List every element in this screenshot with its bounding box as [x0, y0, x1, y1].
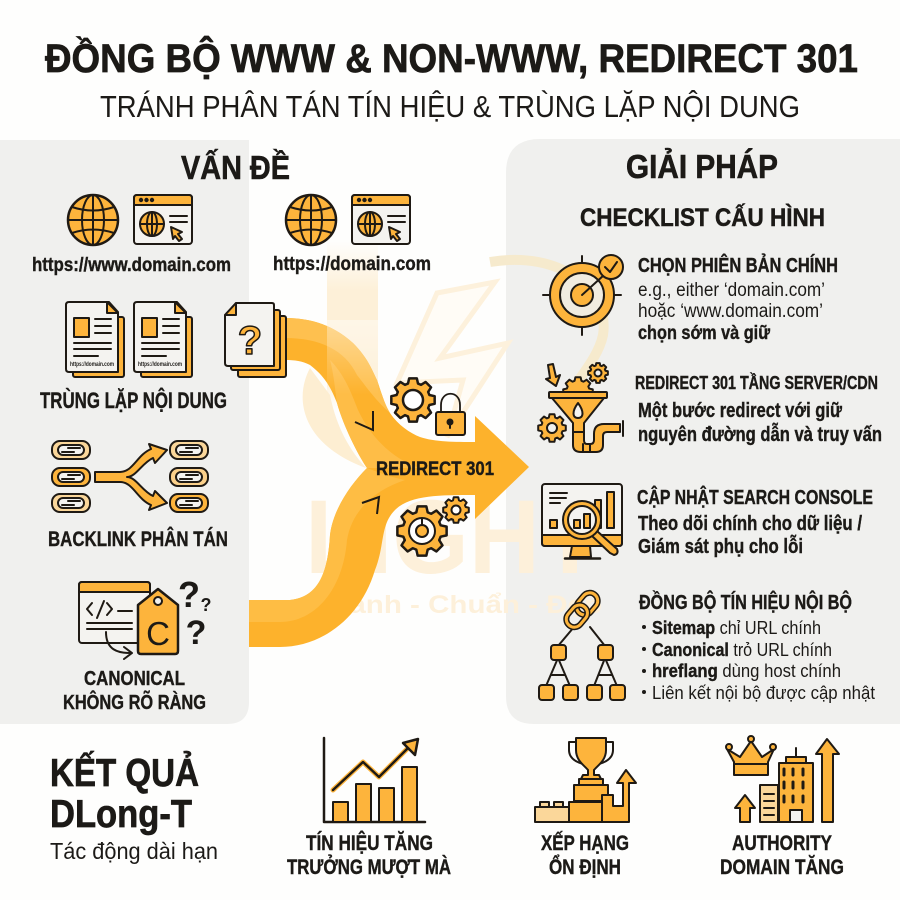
icon: duplicate document 2 [134, 302, 192, 377]
text: choose primary version: e.g., either ‘domain.com’ [638, 280, 825, 301]
text: sync internal signals: Canonical trỏ URL chính [652, 639, 832, 660]
icon: link tree [539, 590, 625, 700]
label: smooth signal growth: TÍN HIỆU TĂNG [306, 831, 433, 855]
icon: monitor analytics [542, 484, 622, 558]
icon: scattered backlinks [52, 441, 208, 512]
icon: duplicate document 1 [66, 302, 124, 377]
label: smooth signal growth [287, 831, 451, 879]
text: server-level redirect [635, 372, 882, 446]
icon: trophy on steps [535, 738, 636, 822]
subheading: checklist: CHECKLIST CẤU HÌNH [580, 203, 825, 232]
label: duplicate content: TRÙNG LẶP NỘI DUNG [40, 388, 227, 413]
panel: problem background [0, 140, 249, 724]
watermark logo [303, 240, 604, 619]
icon: gear and lock [391, 378, 465, 435]
icon: unclear canonical [79, 574, 212, 659]
text: server-level redirect: Một bước redirect với giữ [638, 400, 842, 422]
text: sync internal signals: Liên kết nội bộ được cập nhật [652, 682, 875, 703]
text: update search console: Theo dõi chính cho dữ liệu / [638, 513, 862, 535]
icon: upper chevron [355, 411, 373, 430]
label: stable ranking: ỔN ĐỊNH [549, 855, 621, 879]
icon: funnel and pipe [538, 363, 623, 452]
icon: browser non-www [352, 195, 410, 244]
icon: settings gears [397, 497, 469, 556]
text: choose primary version: chọn sớm và giữ [638, 323, 770, 344]
icon: globe non-www [286, 195, 336, 245]
icon: unclear canonical: C [146, 615, 170, 652]
icon: globe www [68, 195, 118, 245]
arrow: merging redirect flow [249, 318, 529, 647]
label: smooth signal growth: TRƯỞNG MƯỢT MÀ [287, 855, 451, 879]
text: update search console [637, 485, 873, 558]
text: choose primary version [638, 253, 838, 344]
label: domain authority up [720, 832, 844, 879]
label: unclear canonical [63, 667, 206, 714]
watermark logo: LIGHT [305, 479, 600, 596]
label: domain authority up: AUTHORITY [732, 832, 832, 855]
text: sync internal signals [639, 590, 875, 703]
results heading: DLong-T [50, 793, 192, 836]
label: domain authority up: DOMAIN TĂNG [720, 856, 844, 879]
label: unclear canonical: CANONICAL [84, 667, 185, 690]
heading: solution: GIẢI PHÁP [626, 148, 778, 185]
heading: problem: VẤN ĐỀ [181, 149, 290, 186]
watermark logo: Nhanh - Chuẩn - Đẹp [310, 591, 602, 619]
icon: lower chevron [362, 497, 379, 514]
icon: browser www [134, 195, 192, 244]
icon: unclear canonical: ? [200, 595, 212, 615]
text: sync internal signals: Sitemap chỉ URL chính [652, 617, 821, 638]
results heading [50, 751, 218, 864]
text: choose primary version: hoặc ‘www.domain.com’ [638, 301, 823, 322]
results heading: KẾT QUẢ [50, 751, 199, 795]
icon: question document stack [225, 303, 286, 377]
results heading: Tác động dài hạn [50, 838, 218, 864]
icon: growth chart [324, 738, 425, 822]
icon: unclear canonical: ? [178, 574, 200, 615]
label: stable ranking: XẾP HẠNG [541, 832, 629, 855]
text: update search console: Giám sát phụ cho lỗi [638, 534, 803, 558]
icon: question document stack: ? [238, 319, 262, 363]
label: unclear canonical: KHÔNG RÕ RÀNG [63, 690, 206, 714]
arrow label: redirect 301: REDIRECT 301 [376, 459, 494, 480]
label: stable ranking [541, 832, 629, 879]
icon: target [543, 255, 623, 335]
icon: crown, buildings and arrows [726, 736, 839, 822]
panel: solution background [506, 139, 900, 724]
text: choose primary version: CHỌN PHIÊN BẢN CHÍNH [638, 253, 838, 277]
subtitle: TRÁNH PHÂN TÁN TÍN HIỆU & TRÙNG LẶP NỘI DUNG [100, 89, 800, 124]
label: non-www url: https://domain.com [273, 253, 431, 275]
label: scattered backlinks: BACKLINK PHÂN TÁN [48, 526, 228, 551]
text: sync internal signals: hreflang dùng host chính [652, 660, 841, 681]
icon: unclear canonical: ? [186, 614, 206, 652]
text: sync internal signals: ĐỒNG BỘ TÍN HIỆU NỘI BỘ [639, 590, 852, 614]
label: www url: https://www.domain.com [32, 254, 231, 276]
